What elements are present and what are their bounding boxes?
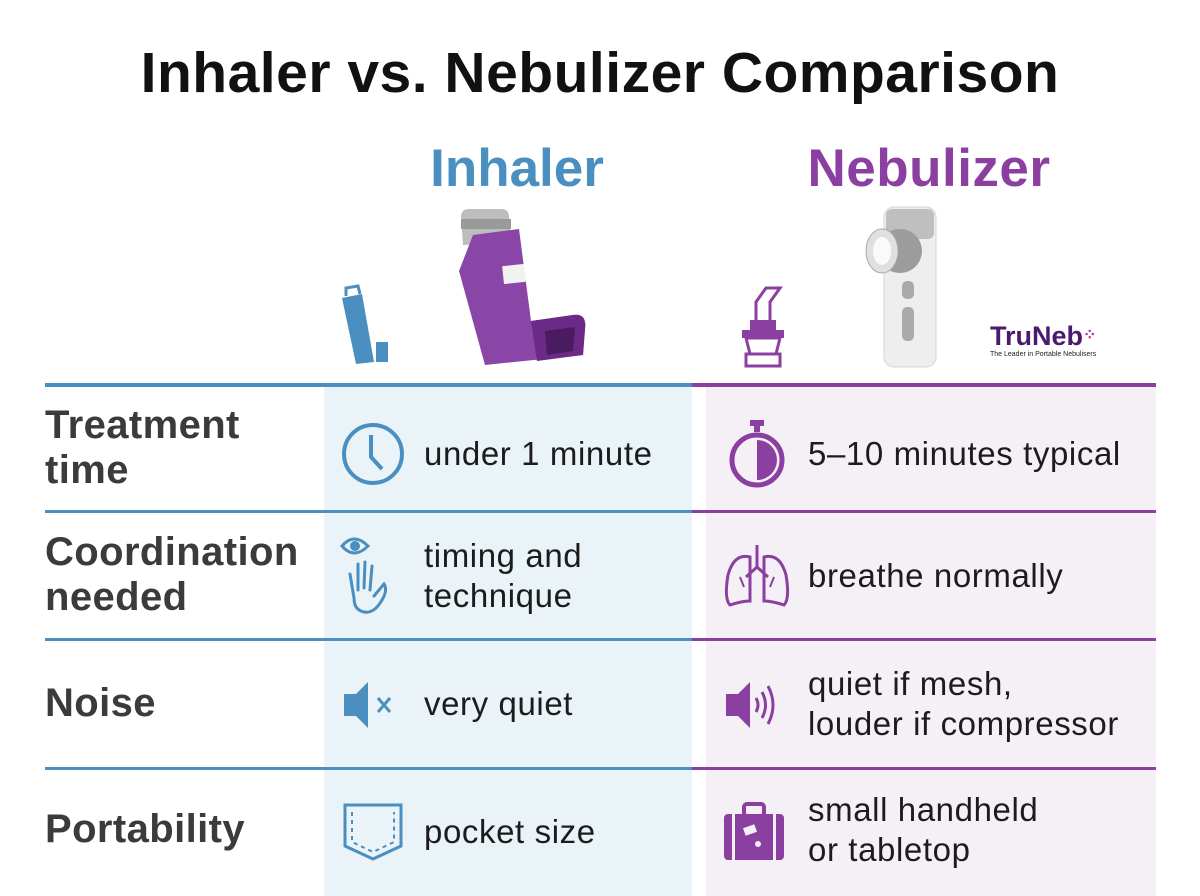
row label: Coordination needed: Coordination xyxy=(45,530,299,574)
value: very quiet: very quiet xyxy=(424,685,573,722)
value: pocket size: pocket size xyxy=(424,813,596,850)
icon: handheld mesh nebulizer xyxy=(866,206,936,368)
value: 5–10 minutes typical: 5–10 minutes typical xyxy=(808,435,1121,472)
row label: Coordination needed xyxy=(45,530,299,619)
heading: Inhaler: Inhaler xyxy=(430,139,604,198)
icon: small blue inhaler xyxy=(342,284,388,364)
value: small handheld or tabletop: small handheld xyxy=(808,791,1038,828)
value: small handheld or tabletop xyxy=(808,791,1038,868)
heading: Nebulizer: Nebulizer xyxy=(807,139,1051,198)
value: breathe normally: breathe normally xyxy=(808,557,1063,594)
value: quiet if mesh, louder if compressor xyxy=(808,665,1119,742)
value: timing and technique: timing and xyxy=(424,537,582,574)
row label: Portability: Portability xyxy=(45,807,245,851)
icon: purple inhaler illustration xyxy=(459,209,586,365)
icon: pocket xyxy=(344,804,402,861)
divider lines xyxy=(45,383,692,387)
logo: TruNeb: The Leader in Portable Nebulisers xyxy=(990,351,1096,358)
icon: clock xyxy=(342,423,404,485)
value: small handheld or tabletop: or tabletop xyxy=(808,831,971,868)
value: timing and technique xyxy=(424,537,582,614)
row label: Noise: Noise xyxy=(45,681,156,725)
row label: Coordination needed: needed xyxy=(45,575,187,619)
icon: stopwatch xyxy=(730,420,784,488)
row label: Treatment time: Treatment xyxy=(45,403,240,447)
icon: muted speaker xyxy=(344,682,391,728)
icon: loud speaker xyxy=(726,682,774,728)
value: under 1 minute: under 1 minute xyxy=(424,435,653,472)
value: quiet if mesh, louder if compressor: quiet if mesh, xyxy=(808,665,1013,702)
icon: lungs xyxy=(724,545,790,607)
icon: suitcase xyxy=(724,802,784,860)
row label: Treatment time xyxy=(45,403,240,492)
value: timing and technique: technique xyxy=(424,577,573,614)
icon: small nebulizer cup xyxy=(742,286,784,368)
row label: Treatment time: time xyxy=(45,448,129,492)
column background: inhaler xyxy=(324,386,692,896)
title: Inhaler vs. Nebulizer Comparison xyxy=(141,41,1059,105)
column background: nebulizer xyxy=(706,386,1156,896)
icon: eye and hand xyxy=(340,538,388,614)
value: quiet if mesh, louder if compressor: louder if compressor xyxy=(808,705,1119,742)
logo: TruNeb: TruNeb⁘ xyxy=(990,321,1096,351)
